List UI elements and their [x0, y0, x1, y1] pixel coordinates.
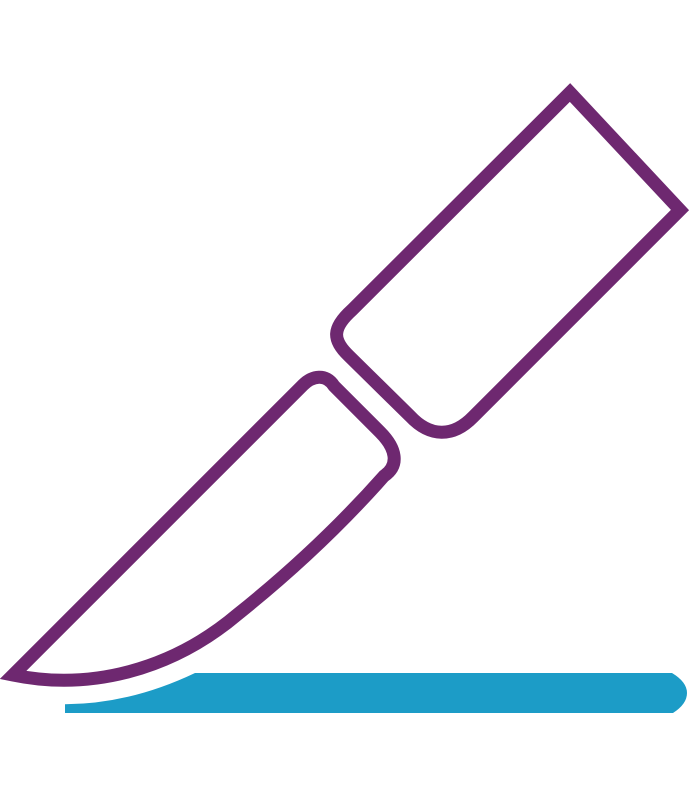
scalpel blade: [13, 377, 394, 680]
scalpel handle: [337, 92, 680, 432]
teal cut surface: [65, 673, 687, 713]
